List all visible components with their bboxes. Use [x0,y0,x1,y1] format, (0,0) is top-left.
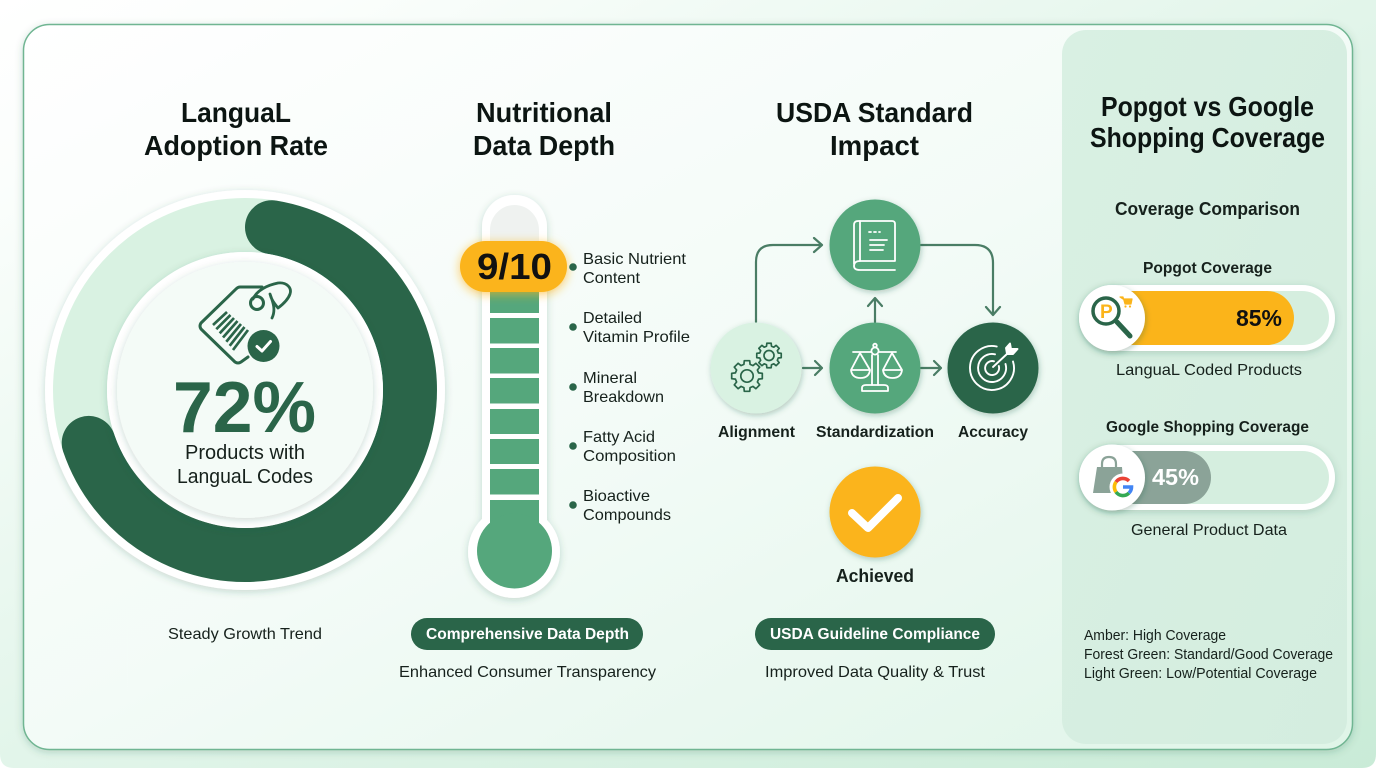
bar: popgot 85%: 85% [1236,305,1282,331]
heading: LanguaL Adoption Rate: LanguaL [181,97,291,128]
donut caption: LanguaL Codes [177,466,313,488]
item: bioactive compounds: Compounds [583,507,671,524]
item: mineral breakdown [569,370,664,406]
item: detailed vitamin profile: Vitamin Profile [583,329,690,346]
item: bioactive compounds [569,488,671,524]
heading: USDA Standard Impact: Impact [830,130,919,161]
donut chart: 72% [45,190,445,590]
label: popgot coverage: Popgot Coverage [1143,260,1272,277]
heading: LanguaL Adoption Rate [144,97,328,161]
item: fatty acid composition: Composition [583,448,676,465]
item: mineral breakdown: Mineral [583,370,637,387]
bar: google 45%: 45% [1152,464,1199,490]
legend: Amber: High Coverage [1084,628,1226,644]
labels: process steps: Accuracy [958,424,1028,441]
item: basic nutrient content: Basic Nutrient [583,251,687,268]
donut caption [177,442,313,488]
panel: coverage comparison [1079,91,1335,682]
label: google shopping coverage: Google Shopping Coverage [1106,419,1309,436]
item: detailed vitamin profile: Detailed [583,310,642,327]
caption: general product data: General Product Data [1131,522,1287,539]
node: alignment gears [710,322,802,414]
heading: Nutritional Data Depth: Data Depth [473,130,615,161]
heading: Nutritional Data Depth [473,97,615,161]
panel: nutritional data depth [399,97,690,681]
legend: Light Green: Low/Potential Coverage [1084,666,1317,682]
heading: Popgot vs Google Shopping Coverage [1090,91,1325,153]
labels: process steps: Standardization [816,424,934,441]
pill: USDA guideline compliance: USDA Guideline Compliance [770,626,980,643]
labels: process steps [718,424,1028,441]
badge: 9/10 [460,241,567,292]
item: mineral breakdown: Breakdown [583,389,664,406]
pill: comprehensive data depth: Comprehensive Data Depth [426,626,629,643]
item: fatty acid composition: Fatty Acid [583,429,655,446]
heading: LanguaL Adoption Rate: Adoption Rate [144,130,328,161]
item: fatty acid composition [569,429,676,465]
panel: LanguaL adoption rate [45,97,445,643]
label: achieved: Achieved [836,566,914,586]
value: 72%: 72% [173,368,316,448]
caption: improved data quality: Improved Data Quality & Trust [765,664,986,681]
caption: enhanced consumer transparency: Enhanced Consumer Transparency [399,664,656,681]
bar: google 45% [1079,445,1335,510]
pill: USDA guideline compliance [755,618,995,650]
heading: Popgot vs Google Shopping Coverage: Popgot vs Google [1101,91,1314,122]
heading: USDA Standard Impact [776,97,973,161]
subheading: coverage comparison: Coverage Comparison [1115,199,1300,219]
item: detailed vitamin profile [569,310,690,346]
donut caption: Products with [185,442,305,464]
heading: USDA Standard Impact: USDA Standard [776,97,973,128]
caption: steady growth trend: Steady Growth Trend [168,626,322,643]
item: bioactive compounds: Bioactive [583,488,650,505]
caption: LanguaL coded products: LanguaL Coded Products [1116,362,1302,379]
bar: popgot 85% [1079,285,1335,351]
icon: google shopping bag [1079,444,1145,510]
legend: Forest Green: Standard/Good Coverage [1084,647,1333,663]
node: guidelines book [830,200,920,290]
icon: price tag with check [200,283,290,363]
node: accuracy target [948,322,1038,414]
item: basic nutrient content [569,251,687,287]
pill: comprehensive data depth [411,618,643,650]
thermometer gauge [468,195,560,598]
badge: 9/10: 9/10 [477,246,552,287]
panel: USDA standard impact [710,97,1038,681]
item: basic nutrient content: Content [583,270,641,287]
icon: popgot magnifier: P [1100,302,1113,323]
panel: coverage background [1062,30,1347,744]
icon: achieved check [830,466,920,558]
icon: popgot magnifier [1079,285,1145,351]
list: data depth levels [569,251,690,524]
heading: Popgot vs Google Shopping Coverage: Shopping Coverage [1090,122,1325,153]
node: standardization scales [830,322,920,414]
labels: process steps: Alignment [718,424,796,441]
arrows: process flow [756,238,1000,375]
legend [1084,628,1333,682]
heading: Nutritional Data Depth: Nutritional [476,97,612,128]
